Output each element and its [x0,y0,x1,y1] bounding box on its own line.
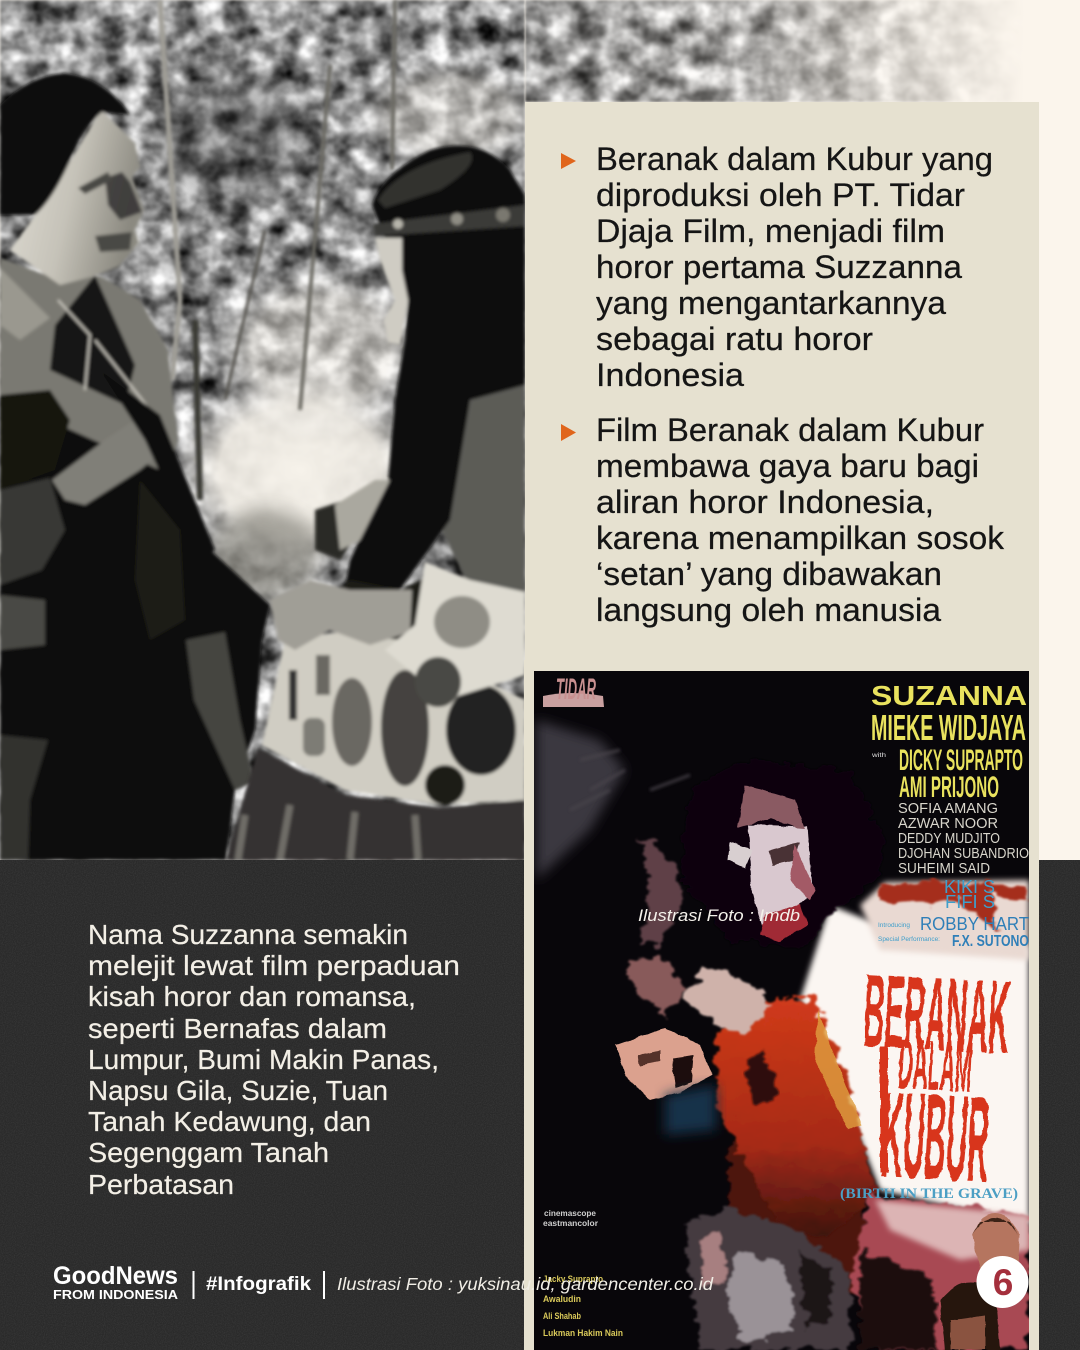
poster blue credits: KIKI S [944,877,995,897]
dark panel paragraph: Tanah Kedawung, dan [88,1106,371,1137]
footer divider [323,1271,325,1299]
poster photo credit: Ilustrasi Foto : Imdb [638,906,800,925]
bullet text two: aliran horor Indonesia, [596,484,934,520]
blue shadow [665,1085,716,1135]
polka cuff [385,562,525,700]
dark red lower slash [730,1140,870,1300]
movie poster: Beranak dalam Kubur [534,671,1029,1350]
page number badge [976,1256,1028,1308]
footer divider [192,1271,194,1299]
dark panel paragraph: seperti Bernafas dalam [88,1013,387,1044]
poster blue credits: Introducing [878,923,910,929]
bottom scene [685,1210,850,1350]
bullet text one: sebagai ratu horor [596,321,873,357]
arm [270,580,412,650]
icon: orange arrow bullet [561,424,576,441]
dark panel paragraph: Segenggam Tanah [88,1137,329,1168]
poster small credits: Jacky Suprapto [543,1274,603,1284]
flames behind names [860,880,1029,960]
poster small credits: cinemascope [544,1209,597,1218]
poster blue credits [878,877,1029,950]
page number badge: 6 [993,1262,1013,1303]
dark panel paragraph: Lumpur, Bumi Makin Panas, [88,1044,439,1075]
lower right pink [850,1195,1029,1350]
bullet text one [596,141,993,393]
hand and robe [625,835,775,1035]
bullet text one: diproduksi oleh PT. Tidar [596,177,965,213]
bullet text two: membawa gaya baru bagi [596,448,979,484]
bullet text one: Djaja Film, menjadi film [596,213,945,249]
footer photo credit: Ilustrasi Foto : yuksinau.id, gardencenter.co.id [337,1274,714,1294]
small figure behind [312,500,350,562]
red slash [715,1000,878,1240]
rope [58,300,150,410]
bullet text two: karena menampilkan sosok [596,520,1005,556]
bullet list [561,141,1005,628]
poster logo [543,678,604,707]
dark panel paragraph: kisah horor dan romansa, [88,981,416,1012]
textured ground patch [186,632,254,790]
dark waist [342,578,423,640]
footer hashtag: #Infografik [206,1274,311,1295]
poster painting [534,671,1029,1350]
poster frame [524,660,1039,1350]
hair [340,146,525,615]
poster supporting cast: AZWAR NOOR [898,815,998,832]
beige text panel [525,102,1039,1350]
poster title [861,953,1013,1208]
screaming face [616,1028,712,1100]
poster logo: TIDAR [556,673,596,706]
icon: orange arrow bullet [561,153,576,169]
poster supporting cast: DJOHAN SUBANDRIO [898,845,1029,862]
shirt [0,257,180,471]
poster supporting cast [898,800,1029,877]
poster cast names [872,686,1026,798]
footer brand logo: GoodNews [53,1262,178,1290]
dark panel paragraph: melejit lewat film perpaduan [88,950,460,981]
poster blue credits: F.X. SUTONO [952,933,1029,950]
poster supporting cast: DEDDY MUDJITO [898,830,1000,847]
headband [373,205,525,236]
portraits lower right [940,1212,1020,1350]
dark lower body [0,425,270,860]
dark bottom background [0,860,1080,1350]
poster small credits [543,1209,623,1338]
white area [800,905,1029,1225]
photo extension at top right, fading into cream [525,0,1080,102]
photo: two women in a forest [0,0,550,860]
bullet text two: ‘setan’ yang dibawakan [596,556,942,592]
hair of ghost [814,900,844,938]
left woman [0,73,270,860]
hat in hand [0,390,70,490]
dark panel paragraph: Nama Suzzanna semakin [88,919,408,950]
forest background [0,0,550,860]
poster blue credits: FIFI S [945,892,995,912]
poster supporting cast: SUHEIMI SAID [898,860,990,877]
footer brand logo: FROM INDONESIA [53,1288,178,1302]
ghost face [728,785,815,942]
bullet text one: yang mengantarkannya [596,285,946,321]
poster blue credits: Special Performance: [878,937,940,943]
poster supporting cast: SOFIA AMANG [898,800,998,817]
poster cast names: SUZANNA [871,680,1027,711]
poster small credits: Ali Shahab [543,1311,581,1321]
poster cast names: with [871,753,886,759]
bullet text one: Beranak dalam Kubur yang [596,141,993,177]
dark panel paragraph: Perbatasan [88,1169,234,1200]
poster small credits: eastmancolor [543,1219,598,1228]
right woman [226,146,525,860]
misty left [536,720,625,880]
bullet text two: Film Beranak dalam Kubur [596,412,984,448]
poster small credits: Awaludin [543,1294,581,1304]
hair [0,73,130,215]
poster blue credits: ROBBY HART [920,914,1029,934]
skirt top [262,632,525,805]
dark sleeve [442,382,525,600]
bullet text two [596,412,1005,628]
poster subtitle: (BIRTH IN THE GRAVE) [840,1186,1018,1202]
bullet text one: horor pertama Suzzanna [596,249,962,285]
poster small credits: Lukman Hakim Nain [543,1328,623,1338]
face edge [375,238,408,345]
neck and face [10,110,144,285]
bullet text one: Indonesia [596,357,744,393]
footer brand logo [53,1262,178,1302]
lower skirt [226,748,525,860]
dark panel paragraph [88,919,460,1200]
dark panel paragraph: Napsu Gila, Suzie, Tuan [88,1075,388,1106]
bullet text two: langsung oleh manusia [596,592,941,628]
hand [52,420,170,505]
